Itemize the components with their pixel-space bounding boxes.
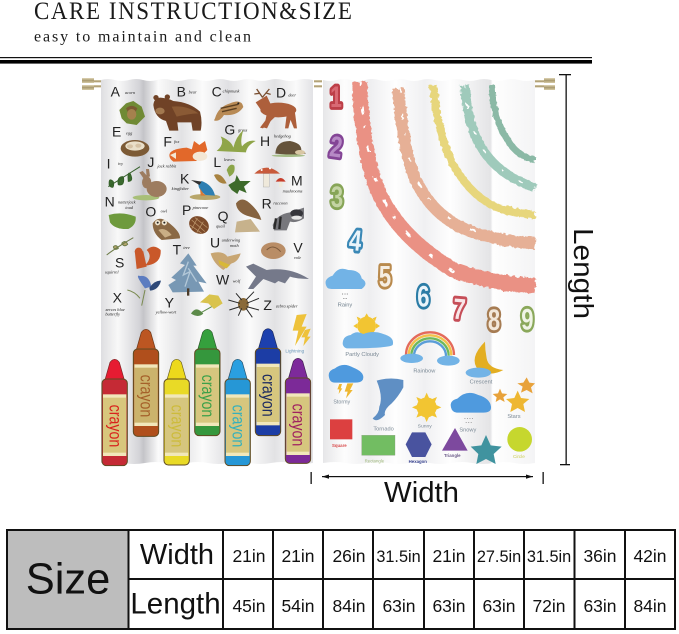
length row: 63in: [432, 596, 466, 616]
width row: 31.5in: [527, 548, 571, 566]
captions: zebra spider: [275, 304, 298, 309]
icon: quail on stump: [235, 199, 261, 232]
icon: flowers: [191, 294, 223, 316]
captions: bear: [189, 90, 197, 95]
captions: egg: [126, 130, 133, 135]
shape: rectangle: [362, 435, 395, 455]
crayon: brown: crayon: [137, 375, 157, 417]
crayon: green: [195, 329, 220, 436]
captions: owl: [161, 208, 168, 213]
number 4: 4: [348, 225, 364, 258]
width dimension: [310, 472, 544, 509]
crayon: purple: [285, 358, 311, 463]
rainy cloud: Rainy: [338, 303, 352, 309]
letters: U: [210, 234, 220, 250]
captions: kingfisher: [172, 186, 189, 191]
icon: deer: [254, 89, 297, 128]
label: Partly Cloudy: [345, 352, 379, 358]
icon: rainbow: [400, 332, 460, 366]
length row: [130, 588, 667, 620]
icon: butterfly: [127, 276, 161, 306]
icon: storm cloud: [329, 365, 363, 398]
captions: butterfly: [105, 312, 120, 317]
captions: [104, 88, 303, 317]
alphabet illustrations: [104, 84, 309, 317]
header rule: [0, 57, 592, 64]
label: Square: [332, 443, 347, 448]
crayon: green: crayon: [198, 375, 218, 417]
left curtain: alphabet and crayons: [101, 79, 313, 466]
length row: 54in: [281, 596, 315, 616]
shape: triangle: [442, 428, 468, 451]
crayon: dark blue: crayon: [259, 374, 279, 417]
captions: quail: [216, 224, 226, 229]
letters: Z: [263, 297, 272, 313]
icon: snow cloud: • • •: [465, 419, 472, 424]
shape: hexagon: [406, 432, 432, 457]
captions: wolf: [233, 278, 241, 283]
icon: snow cloud: • • • •: [464, 415, 474, 420]
width row: 21in: [432, 546, 466, 566]
label: Tornado: [373, 426, 394, 432]
label: Stars: [507, 414, 521, 420]
crayon: yellow: crayon: [167, 405, 187, 447]
length row: Length: [130, 588, 221, 620]
label: Hexagon: [409, 459, 427, 464]
letters: W: [216, 271, 230, 287]
label: Circle: [513, 454, 525, 459]
length row: 63in: [583, 596, 617, 616]
rainy cloud: • • •: [342, 292, 349, 296]
number 8: 8: [488, 305, 500, 337]
width row: 26in: [332, 546, 366, 566]
icon: leaves: [214, 165, 251, 194]
length row: 45in: [232, 596, 266, 616]
number 2: 2: [328, 131, 344, 164]
letters: R: [262, 195, 272, 211]
captions: squirrel: [105, 269, 119, 274]
icon: twig: [107, 238, 133, 255]
length row: 63in: [482, 596, 516, 616]
shape: circle: [507, 427, 532, 452]
length row: 72in: [532, 596, 566, 616]
weather and shapes bottom: [329, 304, 535, 464]
letters: Y: [165, 295, 175, 311]
label: Stormy: [333, 399, 351, 405]
size header cell: [7, 530, 128, 629]
crayon: red: [102, 359, 127, 466]
icon: chipmunk: [214, 102, 243, 121]
crayon rainbow: [359, 82, 535, 286]
label: Crescent: [470, 380, 493, 386]
crayon: purple: crayon: [289, 404, 309, 446]
icon: bear: [153, 94, 202, 131]
letters: M: [291, 173, 303, 189]
lightning label: Lightning: [285, 349, 305, 354]
icon: grass: [217, 130, 256, 152]
rainy cloud: • •: [343, 297, 348, 301]
letters: P: [182, 202, 191, 218]
length label: Length: [568, 228, 599, 319]
subtitle: easy to maintain and clean: [34, 28, 251, 46]
captions: vole: [294, 255, 301, 260]
letters: B: [177, 84, 186, 100]
captions: leaves: [224, 157, 235, 162]
label: Snowy: [459, 427, 476, 433]
number 3: 3: [331, 182, 343, 214]
right curtain fabric: [323, 79, 535, 464]
captions: deer: [288, 93, 296, 98]
icon: stars: [493, 377, 535, 412]
icon: fir tree: [168, 253, 207, 296]
size label: Size: [26, 556, 110, 604]
number 1: 1: [330, 82, 342, 114]
captions: pinecone: [192, 205, 208, 210]
captions: grass: [238, 128, 248, 133]
captions: fox: [174, 139, 179, 144]
captions: natterjack: [118, 199, 136, 204]
captions: moth: [230, 243, 239, 248]
letters: Q: [218, 208, 229, 224]
captions: mushrooms: [283, 188, 303, 193]
captions: hedgehog: [274, 134, 292, 139]
length row: 84in: [633, 596, 667, 616]
shape: star: [471, 435, 502, 464]
icon: snow cloud: [451, 393, 491, 424]
captions: jack rabbit: [156, 164, 177, 169]
lightning icon: [293, 314, 311, 346]
letters: X: [113, 289, 123, 305]
icon: wolf: [246, 264, 309, 289]
icon: crescent moon: [466, 342, 503, 378]
letters: O: [145, 203, 156, 219]
letters: V: [293, 239, 303, 255]
shape: square: [330, 419, 352, 439]
right curtain: rainbow, numbers, weather and shapes: [323, 79, 535, 464]
letters: G: [224, 121, 235, 137]
length row: 84in: [332, 596, 366, 616]
letters: C: [212, 84, 222, 100]
letters: [105, 84, 303, 313]
captions: acorn: [125, 90, 135, 95]
number 5: 5: [379, 261, 391, 293]
left curtain fabric: [101, 79, 313, 464]
width row: 31.5in: [376, 548, 421, 566]
captions: underwing: [222, 238, 241, 243]
crayon: red: crayon: [105, 405, 125, 447]
icon: squirrel: [135, 247, 161, 269]
label: Rainbow: [413, 369, 436, 375]
letters: H: [260, 133, 270, 149]
icon: toad: [109, 213, 136, 229]
letters: F: [163, 134, 172, 150]
icon: raccoon: [273, 208, 304, 230]
icon: moth: [211, 252, 241, 270]
crayons and lightning: [102, 314, 311, 466]
captions: ivy: [118, 161, 123, 166]
letters: E: [112, 124, 121, 140]
icon: mushrooms: [254, 167, 286, 187]
letters: S: [115, 255, 124, 271]
icon: hedgehog: [272, 141, 306, 157]
crayon: dark blue: [255, 329, 281, 436]
icon: dormouse: [261, 242, 286, 259]
icon: ivy: [108, 167, 140, 187]
size table: [7, 530, 675, 629]
icon: acorn: [119, 101, 145, 125]
length row: 63in: [382, 596, 416, 616]
table grid: [7, 530, 675, 629]
crayon: light blue: [225, 359, 250, 466]
letters: N: [105, 194, 115, 210]
icon: tornado: [373, 378, 403, 420]
captions: xerces blue: [104, 307, 125, 312]
letters: I: [107, 155, 111, 171]
number 9: 9: [521, 304, 533, 336]
icon: spider: [228, 292, 259, 317]
icon: rabbit: [133, 169, 167, 200]
letters: T: [173, 241, 182, 257]
width row: 27.5in: [477, 548, 521, 566]
width label: Width: [384, 477, 459, 509]
captions: yellow-wort: [155, 309, 177, 314]
rainy cloud: [326, 269, 365, 309]
label: Sunny: [418, 423, 432, 429]
number 6: 6: [417, 281, 429, 313]
captions: toad: [125, 205, 134, 210]
icon: owl: [153, 219, 180, 240]
icon: sun: [412, 393, 441, 422]
width row: 21in: [281, 546, 315, 566]
label: Triangle: [444, 453, 461, 458]
width row: 21in: [232, 546, 266, 566]
crayon: light blue: crayon: [228, 405, 248, 447]
letters: K: [180, 171, 190, 187]
width row: 36in: [583, 546, 617, 566]
width row: 42in: [633, 546, 667, 566]
icon: kingfisher: [190, 180, 220, 200]
icon: nest: [121, 140, 149, 157]
captions: raccoon: [273, 200, 288, 205]
letters: L: [213, 154, 221, 170]
letters: A: [111, 84, 121, 100]
icon: fox: [169, 141, 207, 162]
captions: chipmunk: [223, 88, 240, 93]
captions: tree: [183, 245, 190, 250]
letters: D: [276, 85, 286, 101]
letters: J: [147, 154, 154, 170]
label: Rectangle: [365, 458, 385, 463]
crayon: brown: [133, 329, 159, 436]
width row: Width: [140, 539, 214, 571]
crayon: yellow: [164, 359, 189, 465]
icon: pinecone: [186, 213, 212, 237]
numbers and weather top: [326, 82, 467, 326]
icon: partly cloudy: [343, 313, 393, 348]
width row: [140, 539, 667, 571]
number 7: 7: [452, 294, 467, 326]
curtain rod finials: [82, 78, 555, 90]
